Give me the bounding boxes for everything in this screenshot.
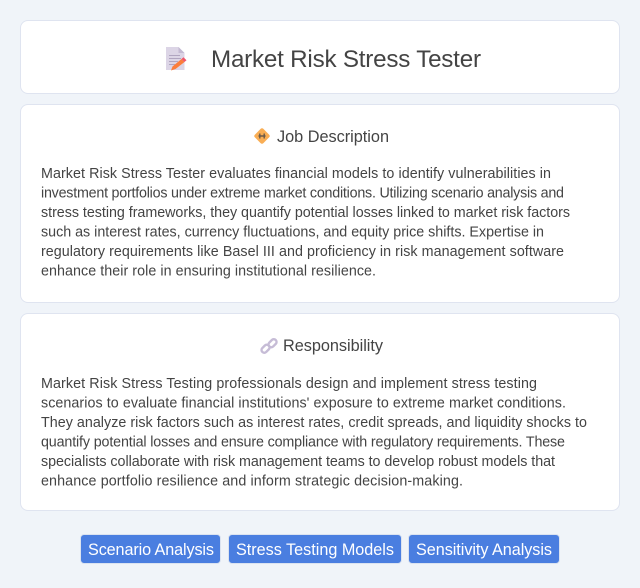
text block: job description: investment portfolios under extreme market conditions. Utilizing scenario analysis and	[41, 186, 564, 202]
text block: job description: such as interest rates, currency fluctuations, and equity price shifts. Expertise in	[41, 224, 544, 240]
icon: chain link	[260, 338, 278, 354]
text block: job description: Market Risk Stress Tester evaluates financial models to identify vulnerabilities in	[41, 166, 551, 182]
tag: stress testing models	[228, 534, 402, 564]
text block: responsibility: scenarios to evaluate financial institutions' exposure to extreme market conditions.	[41, 396, 566, 412]
panel: job description	[20, 104, 620, 303]
text block: responsibility	[41, 376, 587, 490]
text block: responsibility: quantify potential losses and ensure compliance with regulatory requirements. These	[41, 434, 565, 450]
heading: responsibility: Responsibility	[283, 337, 384, 355]
text block: job description: enhance their role in ensuring institutional resilience.	[41, 264, 376, 280]
text block: responsibility: specialists collaborate with risk management teams to develop robust models that	[41, 454, 555, 470]
tag: stress testing models: Stress Testing Models	[236, 541, 394, 559]
text block: job description: regulatory requirements like Basel III and proficiency in risk management software	[41, 244, 564, 260]
panel: responsibility	[20, 313, 620, 511]
text block: responsibility: enhance portfolio resilience and inform strategic decision-making.	[41, 474, 463, 490]
title: Market Risk Stress Tester	[211, 46, 481, 73]
icon: document with pencil	[166, 47, 186, 70]
tag: scenario analysis	[80, 534, 221, 564]
heading: job description: Job Description	[277, 128, 389, 146]
tag: scenario analysis: Scenario Analysis	[88, 541, 214, 559]
text block: responsibility: They analyze risk factors such as interest rates, credit spreads, and liquidity shocks to	[41, 415, 587, 431]
text block: responsibility: Market Risk Stress Testing professionals design and implement stress testing	[41, 376, 537, 392]
tag: sensitivity analysis: Sensitivity Analysis	[416, 541, 552, 559]
icon: orange diamond	[254, 128, 270, 144]
text block: job description: stress testing frameworks, they quantify potential losses linked to market risk factors	[41, 205, 570, 221]
text block: job description	[41, 166, 570, 280]
panel: title card	[20, 20, 620, 94]
tag: sensitivity analysis	[408, 534, 560, 564]
